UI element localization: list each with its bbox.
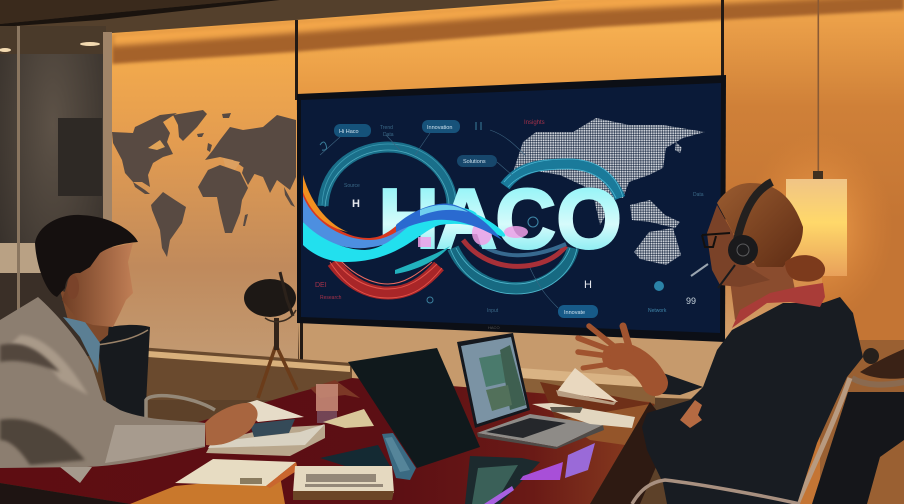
black laptop lid — [348, 348, 480, 468]
ceiling dark line — [0, 0, 280, 27]
conference table — [0, 378, 672, 504]
small screen labels and connector lines: Source — [344, 183, 360, 189]
stack of papers at man's hand — [206, 400, 325, 456]
laptop screen — [457, 333, 530, 428]
ledge below wall — [112, 345, 655, 405]
woman's chair arm — [632, 480, 800, 504]
papers and white notebook right of laptop — [532, 368, 635, 428]
left lower red ring — [330, 260, 442, 298]
dotted asia map — [513, 118, 705, 265]
man's shirt — [63, 317, 100, 373]
small screen labels and connector lines: 99 — [686, 296, 696, 306]
small screen labels and connector lines: DEI — [315, 282, 327, 289]
small screen labels and connector lines: Data — [383, 132, 394, 138]
pendant lamp — [786, 0, 847, 276]
small H marks on screen — [352, 198, 592, 291]
small screen labels and connector lines: Trend — [380, 125, 393, 131]
man's jacket — [0, 297, 205, 483]
screen display area — [301, 83, 721, 333]
woman's scarf — [732, 283, 825, 328]
glass partition on left — [0, 26, 112, 356]
man's face — [62, 243, 133, 327]
small screen labels and connector lines: Data — [693, 192, 704, 198]
pill labels on screen: Innovation — [427, 125, 452, 131]
flowing ribbon left — [303, 175, 505, 274]
ceiling — [0, 0, 560, 33]
tripod with microphone — [244, 272, 297, 398]
laptop base — [477, 414, 604, 449]
chair behind man — [95, 325, 215, 425]
small screen labels and connector lines: Input — [487, 308, 499, 314]
woman's glasses — [702, 233, 730, 247]
laptop and purple reflection on table — [465, 443, 595, 504]
dark object behind woman's shoulder — [863, 348, 879, 364]
dark folder by laptop — [320, 445, 390, 466]
small ring glyph in letter C — [528, 217, 538, 227]
small screen labels and connector lines: Insights — [524, 120, 545, 126]
ceiling dark beam — [0, 0, 250, 24]
pill labels on screen: Hi Haco — [339, 129, 359, 135]
distant notebook on table — [323, 409, 374, 428]
right upper teal ring — [504, 159, 623, 198]
pill labels on screen: Innovate — [564, 310, 585, 316]
world map on wall — [112, 110, 296, 257]
woman's chair back — [797, 349, 904, 504]
presentation screen — [297, 75, 726, 342]
pill labels on screen: Solutions — [463, 159, 486, 165]
man seated at left — [0, 215, 258, 483]
man's neck — [60, 290, 110, 345]
small screen labels and connector lines — [315, 120, 708, 314]
left upper teal ring — [322, 144, 456, 207]
HACO title: HACO — [378, 172, 622, 267]
small screen labels and connector lines: Research — [320, 295, 342, 301]
man's hand — [205, 403, 258, 445]
pill labels on screen — [334, 120, 598, 318]
woman's hair bun — [785, 255, 825, 282]
small H marks on screen: H — [584, 279, 592, 291]
man's ear — [67, 275, 79, 299]
wall divider posts — [295, 0, 724, 362]
small H marks on screen: H — [352, 198, 360, 210]
woman's raised hand — [578, 326, 655, 383]
woman's hand on arm — [680, 400, 702, 428]
woman seated at right — [578, 182, 879, 504]
woman's jacket — [642, 297, 863, 504]
pink highlights in letters — [418, 221, 528, 247]
crystal paperweight — [382, 433, 416, 480]
pendant lamp glow — [743, 133, 893, 323]
presentation screen: HACO — [488, 325, 500, 330]
man's hair — [35, 215, 138, 297]
woman's face — [707, 205, 770, 287]
headset — [718, 182, 772, 288]
silver laptop — [457, 333, 604, 449]
small screen labels and connector lines: Network — [648, 308, 667, 314]
center red and blue lines — [463, 240, 566, 266]
right lower teal ring — [450, 248, 577, 294]
open binder on table — [175, 459, 298, 488]
glass of water on table — [316, 384, 338, 423]
document pile on table — [293, 466, 394, 500]
woman's hair — [717, 183, 803, 267]
woman's neck — [730, 262, 795, 320]
